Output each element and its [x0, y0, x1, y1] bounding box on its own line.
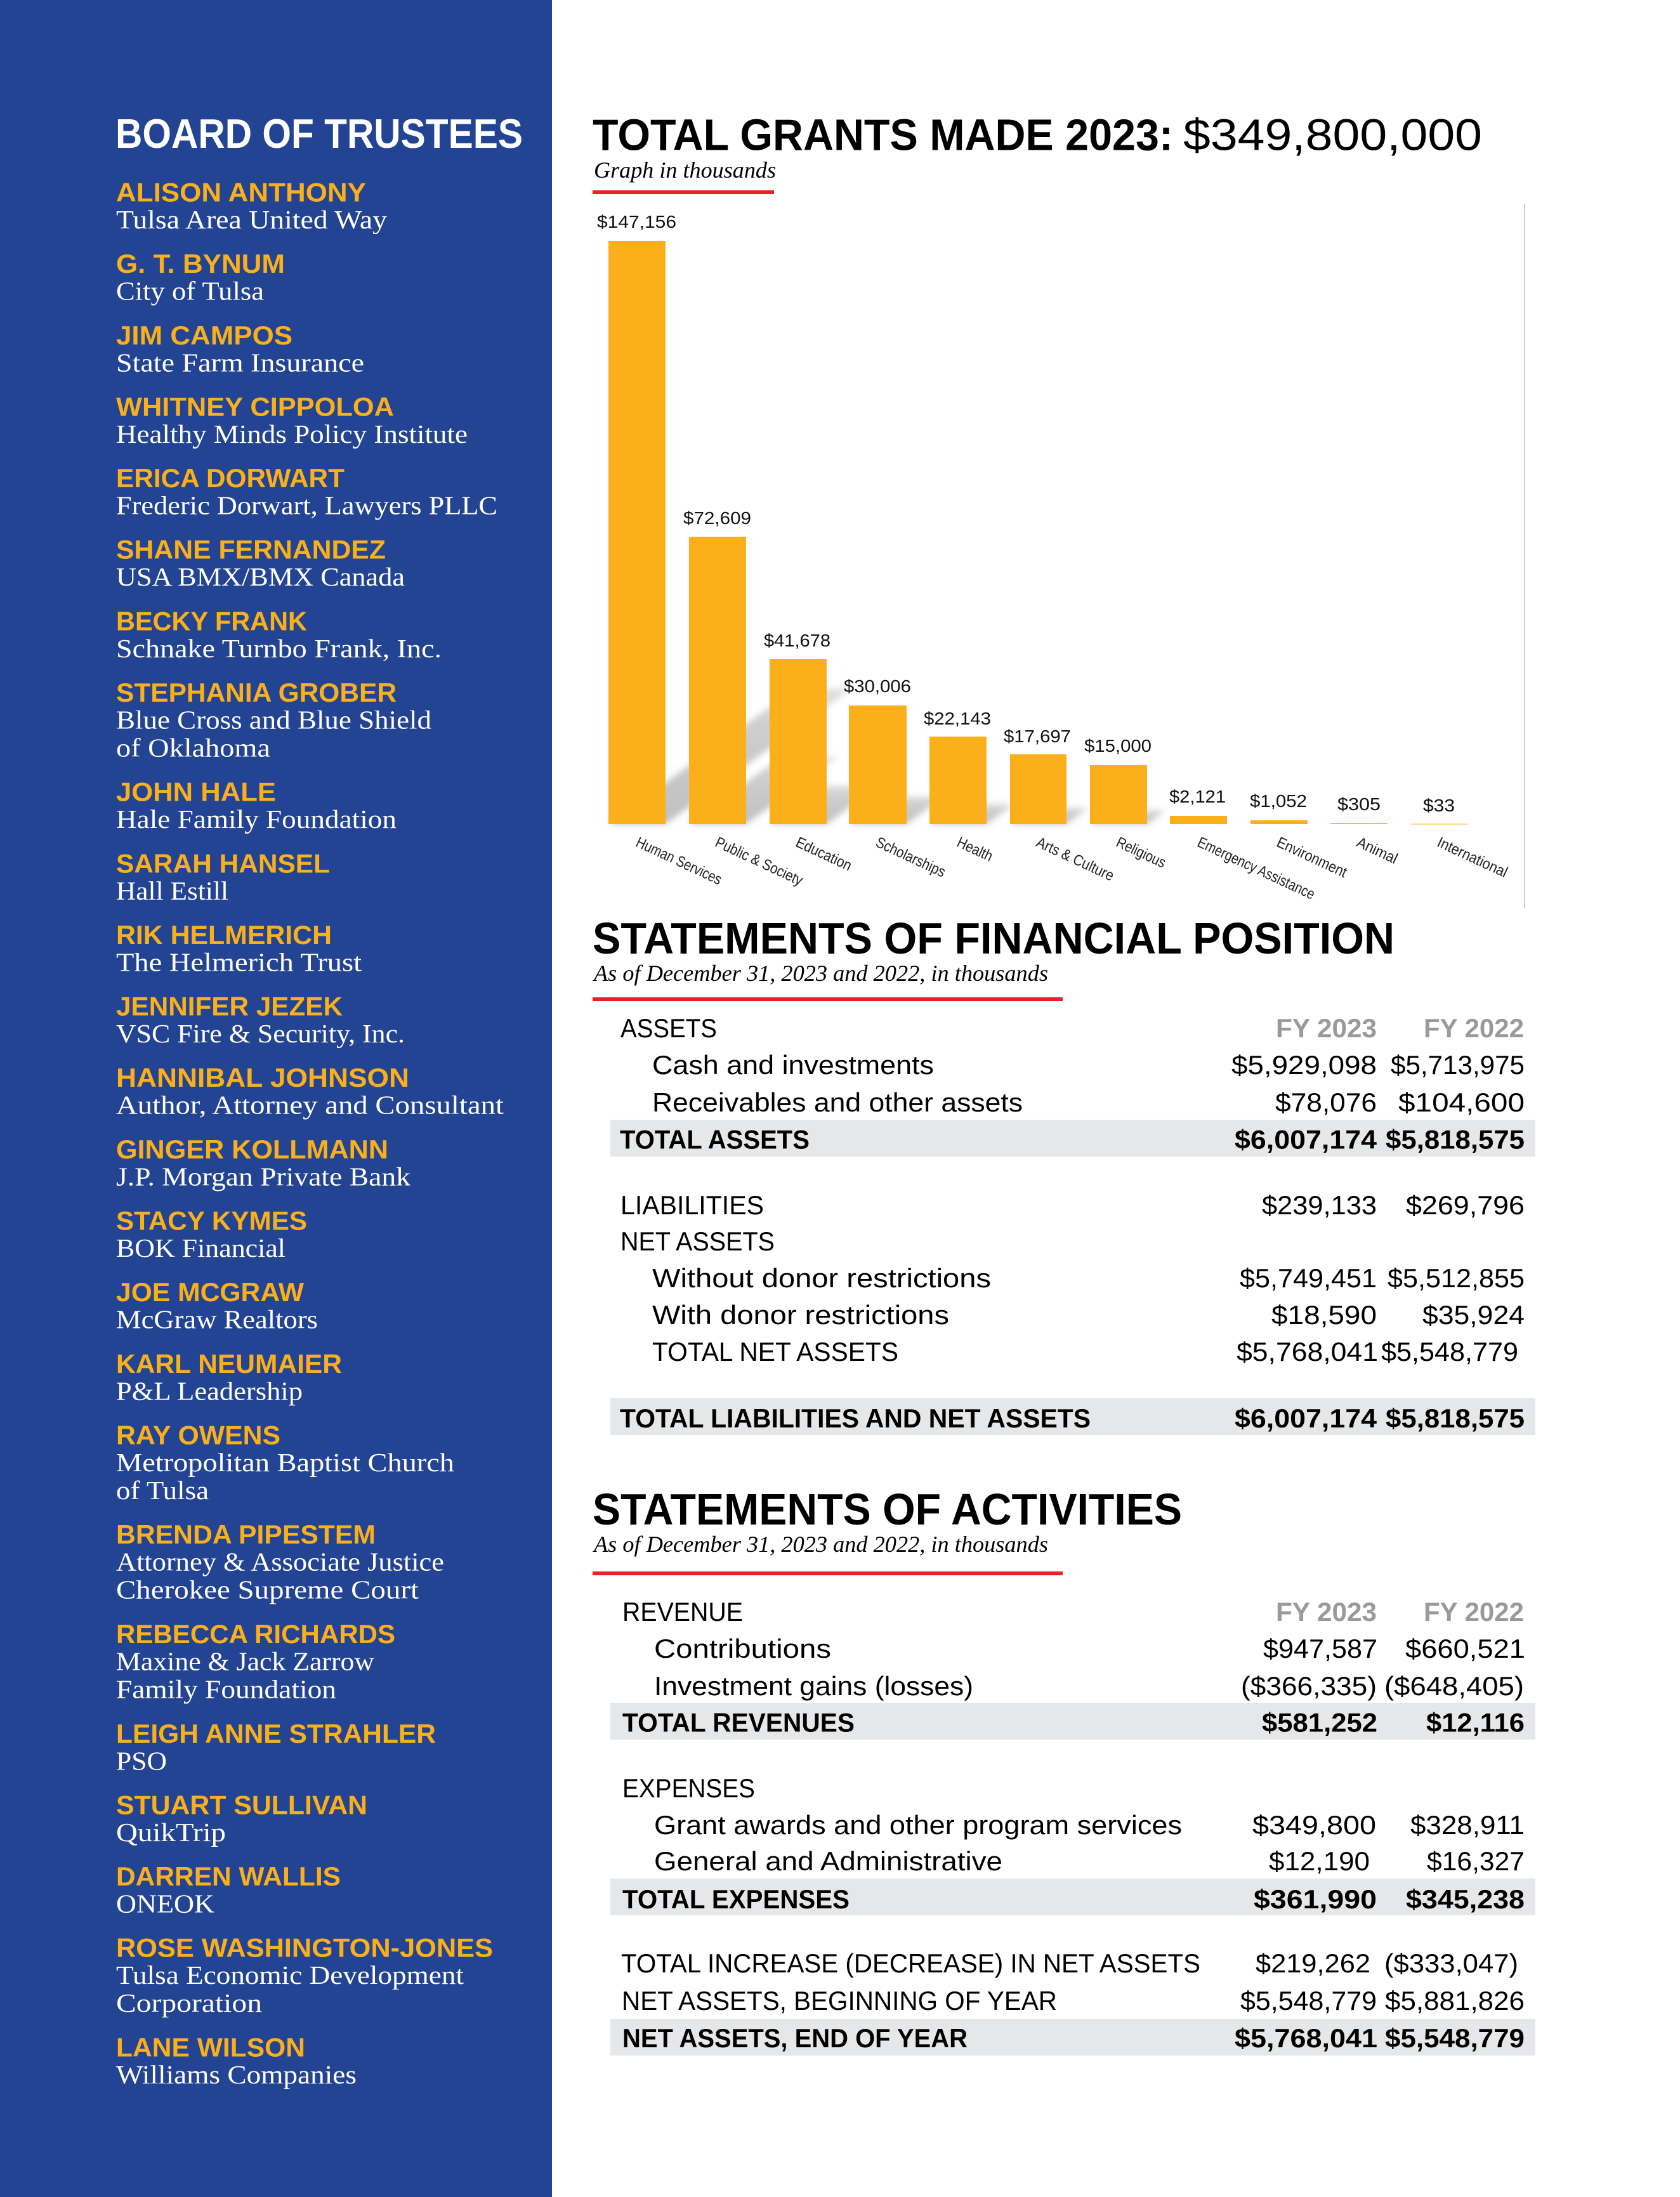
- trustee: Jennifer Jezek: VSC Fire & Security, Inc.: [116, 1019, 405, 1048]
- trustee: Ray Owens: [116, 1420, 454, 1505]
- row: contributions: [654, 1634, 1525, 1663]
- trustee: G. T. Bynum: [116, 249, 285, 306]
- bar: education: $41,678: [764, 631, 830, 650]
- trustee: Ray Owens: RAY OWENS: [116, 1420, 280, 1450]
- row: liabilities: $269,796: [1406, 1190, 1525, 1220]
- trustee: Lane Wilson: [116, 2033, 357, 2089]
- trustee: Sarah Hansel: SARAH HANSEL: [116, 848, 330, 878]
- trustee: Stacy Kymes: STACY KYMES: [116, 1205, 307, 1236]
- trustee: Shane Fernandez: SHANE FERNANDEZ: [116, 535, 386, 565]
- row: total revenues: [610, 1703, 1535, 1740]
- row: expenses header: EXPENSES: [622, 1773, 755, 1803]
- row: assets header: ASSETS: [620, 1013, 717, 1043]
- row: liabilities: $239,133: [1262, 1190, 1377, 1220]
- bar: education: Education: [793, 834, 855, 874]
- row: contributions: $947,587: [1263, 1634, 1377, 1663]
- row: general and administrative: General and Administrative: [654, 1846, 1002, 1876]
- trustee: Hannibal Johnson: [116, 1063, 504, 1120]
- bar: arts and culture: [1004, 726, 1117, 884]
- trustee: Rebecca Richards: REBECCA RICHARDS: [116, 1619, 395, 1649]
- trustee: Brenda Pipestem: Cherokee Supreme Court: [116, 1575, 419, 1604]
- row: net assets beginning of year: $5,881,826: [1385, 1986, 1525, 2016]
- bar: health: $22,143: [924, 709, 991, 728]
- row: without donor restrictions: [652, 1263, 1525, 1293]
- trustee: Sarah Hansel: [116, 848, 330, 905]
- trustee: Becky Frank: [116, 606, 442, 663]
- row: receivables: [652, 1087, 1525, 1117]
- trustee: Rik Helmerich: The Helmerich Trust: [116, 948, 362, 977]
- trustee: Rose Washington-Jones: ROSE WASHINGTON-JONES: [116, 1933, 493, 1963]
- trustee: Stuart Sullivan: STUART SULLIVAN: [116, 1790, 367, 1820]
- trustee: Hannibal Johnson: HANNIBAL JOHNSON: [116, 1063, 409, 1092]
- trustee: Stephania Grober: Blue Cross and Blue Shield: [116, 705, 431, 734]
- row: general and administrative: $16,327: [1427, 1846, 1525, 1876]
- trustee: Ray Owens: Metropolitan Baptist Church: [116, 1448, 454, 1477]
- bar: religious: $15,000: [1084, 736, 1152, 756]
- bar: scholarships: $30,006: [844, 676, 911, 696]
- bar: health: Health: [954, 834, 995, 865]
- row: grant awards: Grant awards and other program services: [654, 1810, 1182, 1840]
- row: grant awards: $349,800: [1252, 1810, 1376, 1840]
- trustee: Rose Washington-Jones: Corporation: [116, 1988, 262, 2017]
- row: net assets beginning of year: $5,548,779: [1240, 1986, 1377, 2016]
- bar: international: [1411, 796, 1510, 881]
- row: total assets: $5,818,575: [1386, 1124, 1525, 1155]
- bar: human services: $147,156: [597, 212, 676, 232]
- trustee: Erica Dorwart: Frederic Dorwart, Lawyers PLLC: [116, 491, 497, 520]
- subtitle: financial position date: As of December 31, 2023 and 2022, in thousands: [593, 961, 1048, 986]
- row: total net assets: $5,548,779: [1381, 1337, 1518, 1367]
- trustee: Stephania Grober: [116, 678, 431, 762]
- row: with donor restrictions: [652, 1300, 1525, 1330]
- trustee: John Hale: JOHN HALE: [116, 777, 276, 807]
- trustee: Sarah Hansel: Hall Estill: [116, 876, 228, 905]
- row: net assets end of year: $5,548,779: [1385, 2023, 1525, 2053]
- trustee: Rebecca Richards: Maxine & Jack Zarrow: [116, 1647, 374, 1676]
- trustee: Erica Dorwart: ERICA DORWART: [116, 463, 345, 493]
- row: without donor restrictions: $5,749,451: [1240, 1263, 1377, 1293]
- trustee: Stuart Sullivan: QuikTrip: [116, 1818, 226, 1847]
- trustee: Stuart Sullivan: [116, 1790, 367, 1847]
- row: receivables: $104,600: [1398, 1087, 1525, 1117]
- trustee: Jim Campos: [116, 320, 364, 377]
- trustee: Brenda Pipestem: BRENDA PIPESTEM: [116, 1519, 376, 1549]
- row: total revenues: $12,116: [1426, 1708, 1525, 1737]
- bar: scholarships: Scholarships: [873, 834, 948, 881]
- row: with donor restrictions: With donor restrictions: [652, 1300, 949, 1330]
- trustee: Karl Neumaier: [116, 1349, 342, 1405]
- row: contributions: $660,521: [1405, 1634, 1525, 1663]
- trustee: John Hale: Hale Family Foundation: [116, 804, 397, 834]
- bar: public and society: Public & Society: [712, 834, 806, 889]
- trustee: Lane Wilson: Williams Companies: [116, 2060, 357, 2089]
- trustee: G. T. Bynum: G. T. BYNUM: [116, 249, 285, 279]
- trustee: Alison Anthony: Tulsa Area United Way: [116, 205, 388, 234]
- trustee: Rebecca Richards: [116, 1619, 395, 1704]
- trustee: Whitney Cippoloa: WHITNEY CIPPOLOA: [116, 391, 394, 421]
- trustee: Jennifer Jezek: JENNIFER JEZEK: [116, 992, 343, 1021]
- row: total liabilities and net assets: TOTAL LIABILITIES AND NET ASSETS: [620, 1403, 1091, 1433]
- trustee: Stephania Grober: of Oklahoma: [116, 733, 270, 762]
- trustee: John Hale: [116, 777, 397, 834]
- row: total increase: [621, 1948, 1518, 1978]
- row: grant awards: $328,911: [1410, 1810, 1525, 1840]
- row: receivables: $78,076: [1275, 1087, 1377, 1117]
- bar: health: [924, 709, 995, 865]
- trustee: Darren Wallis: [116, 1861, 341, 1918]
- row: total expenses: [610, 1879, 1535, 1915]
- bar: scholarships: [844, 676, 948, 881]
- trustee: Darren Wallis: ONEOK: [116, 1889, 214, 1918]
- row: net assets header: NET ASSETS: [620, 1226, 775, 1256]
- row: total assets: $6,007,174: [1235, 1124, 1377, 1155]
- row: net assets end of year: $5,768,041: [1235, 2023, 1377, 2053]
- row: investment gains: ($648,405): [1384, 1671, 1524, 1701]
- title: total grants made 2023: TOTAL GRANTS MADE 2023:: [593, 110, 1173, 160]
- row: total revenues: $581,252: [1262, 1708, 1377, 1737]
- panel: statements of financial position: [593, 914, 1535, 1435]
- row: cash and investments: $5,929,098: [1231, 1050, 1377, 1080]
- row: investment gains: ($366,335): [1241, 1671, 1377, 1701]
- row: net assets end of year: [610, 2019, 1535, 2056]
- row: assets header: FY 2022: [1424, 1013, 1524, 1043]
- row: revenue header: REVENUE: [622, 1597, 743, 1627]
- trustee: Leigh Anne Strahler: PSO: [116, 1746, 167, 1775]
- bar: animal: $305: [1337, 794, 1381, 814]
- trustee: Rik Helmerich: [116, 920, 362, 977]
- trustee: Ginger Kollmann: [116, 1134, 411, 1191]
- heading: board of trustees: BOARD OF TRUSTEES: [115, 110, 523, 157]
- row: investment gains: [654, 1671, 1524, 1701]
- trustee: Becky Frank: Schnake Turnbo Frank, Inc.: [116, 634, 442, 663]
- bar: animal: [1330, 794, 1400, 867]
- trustee: Shane Fernandez: [116, 535, 405, 591]
- subtitle: activities date: As of December 31, 2023 and 2022, in thousands: [593, 1531, 1048, 1557]
- row: general and administrative: [654, 1846, 1525, 1876]
- row: net assets beginning of year: NET ASSETS, BEGINNING OF YEAR: [622, 1986, 1057, 2016]
- row: without donor restrictions: Without donor restrictions: [652, 1263, 991, 1293]
- bar: animal: Animal: [1354, 834, 1400, 867]
- trustee: Whitney Cippoloa: [116, 391, 468, 449]
- row: assets header: [620, 1013, 1524, 1043]
- row: total increase: ($333,047): [1384, 1948, 1518, 1978]
- trustee: Joe McGraw: McGraw Realtors: [116, 1305, 318, 1334]
- row: total expenses: TOTAL EXPENSES: [622, 1884, 850, 1914]
- title: total grants made 2023: $349,800,000: [1183, 110, 1482, 160]
- row: total assets: [610, 1120, 1535, 1157]
- row: revenue header: FY 2023: [1276, 1597, 1377, 1627]
- trustee: Whitney Cippoloa: Healthy Minds Policy Institute: [116, 419, 468, 449]
- bar: human services: Human Services: [633, 834, 725, 888]
- trustee: Alison Anthony: ALISON ANTHONY: [116, 178, 366, 207]
- row: cash and investments: Cash and investments: [652, 1050, 934, 1080]
- row: total increase: TOTAL INCREASE (DECREASE) IN NET ASSETS: [621, 1948, 1200, 1978]
- row: total liabilities and net assets: $6,007,174: [1235, 1403, 1377, 1433]
- bar: environment: [1250, 791, 1350, 881]
- row: cash and investments: [652, 1050, 1525, 1080]
- trustee: Brenda Pipestem: Attorney & Associate Justice: [116, 1547, 444, 1577]
- row: liabilities: LIABILITIES: [620, 1190, 764, 1220]
- trustee: Ginger Kollmann: GINGER KOLLMANN: [116, 1134, 388, 1164]
- trustee: Erica Dorwart: [116, 463, 497, 520]
- trustee: Darren Wallis: DARREN WALLIS: [116, 1861, 341, 1891]
- trustee: Jim Campos: State Farm Insurance: [116, 348, 364, 377]
- panel: statements of activities: [593, 1485, 1535, 2056]
- trustee: Alison Anthony: [116, 178, 388, 234]
- row: total net assets: TOTAL NET ASSETS: [652, 1337, 898, 1367]
- bar: emergency assistance: Emergency Assistance: [1195, 834, 1318, 903]
- trustee: G. T. Bynum: City of Tulsa: [116, 277, 264, 306]
- row: total net assets: $5,768,041: [1237, 1337, 1378, 1367]
- row: with donor restrictions: $35,924: [1422, 1300, 1525, 1330]
- row: total expenses: $345,238: [1406, 1884, 1525, 1914]
- row: assets header: FY 2023: [1276, 1013, 1377, 1043]
- trustee: Hannibal Johnson: Author, Attorney and Consultant: [116, 1091, 504, 1120]
- row: total liabilities and net assets: $5,818,575: [1386, 1403, 1525, 1433]
- trustee: Karl Neumaier: P&L Leadership: [116, 1376, 303, 1405]
- bar: public and society: $72,609: [683, 508, 751, 528]
- bar: arts and culture: Arts & Culture: [1034, 834, 1117, 884]
- trustee: Jim Campos: JIM CAMPOS: [116, 320, 292, 350]
- bar: human services: [597, 212, 725, 888]
- row: total increase: $219,262: [1256, 1948, 1370, 1978]
- trustee: Stephania Grober: STEPHANIA GROBER: [116, 678, 397, 707]
- bar: emergency assistance: $2,121: [1169, 787, 1226, 806]
- trustee: Leigh Anne Strahler: LEIGH ANNE STRAHLER: [116, 1719, 436, 1748]
- row: total expenses: $361,990: [1254, 1884, 1377, 1914]
- row: total revenues: TOTAL REVENUES: [622, 1708, 855, 1737]
- bar: religious: [1084, 736, 1169, 872]
- trustee: Stacy Kymes: [116, 1205, 307, 1262]
- trustee: Stacy Kymes: BOK Financial: [116, 1233, 285, 1262]
- row: total liabilities and net assets: [610, 1398, 1535, 1435]
- trustee: Leigh Anne Strahler: [116, 1719, 436, 1775]
- bar: international: International: [1434, 834, 1510, 881]
- bar chart: grants by category: [597, 204, 1525, 908]
- row: revenue header: FY 2022: [1424, 1597, 1524, 1627]
- heading: statements of activities: STATEMENTS OF ACTIVITIES: [593, 1485, 1182, 1534]
- subtitle: graph in thousands: Graph in thousands: [594, 157, 776, 183]
- title: total grants made 2023: [593, 110, 1482, 160]
- panel: board of trustees sidebar: [0, 0, 552, 2197]
- trustee: Joe McGraw: JOE MCGRAW: [116, 1277, 304, 1307]
- bar: education: [764, 631, 855, 874]
- trustee: Ginger Kollmann: J.P. Morgan Private Bank: [116, 1162, 411, 1191]
- trustee: Lane Wilson: LANE WILSON: [116, 2033, 305, 2062]
- row: receivables: Receivables and other assets: [652, 1087, 1023, 1117]
- bar: international: $33: [1423, 796, 1455, 815]
- row: net assets end of year: NET ASSETS, END OF YEAR: [622, 2023, 968, 2053]
- row: contributions: Contributions: [654, 1634, 831, 1663]
- trustee: Karl Neumaier: KARL NEUMAIER: [116, 1349, 342, 1379]
- bar: religious: Religious: [1113, 834, 1169, 872]
- row: cash and investments: $5,713,975: [1391, 1050, 1525, 1080]
- trustee: Rose Washington-Jones: [116, 1933, 493, 2017]
- trustee: Shane Fernandez: USA BMX/BMX Canada: [116, 562, 405, 591]
- row: net assets beginning of year: [622, 1986, 1525, 2016]
- trustee: Joe McGraw: [116, 1277, 318, 1334]
- row: without donor restrictions: $5,512,855: [1388, 1263, 1525, 1293]
- bar: arts and culture: $17,697: [1004, 726, 1071, 746]
- bar: public and society: [683, 508, 806, 889]
- bar: emergency assistance: [1169, 787, 1318, 903]
- row: general and administrative: $12,190: [1269, 1846, 1370, 1876]
- row: total assets: TOTAL ASSETS: [620, 1124, 810, 1155]
- trustee: Ray Owens: of Tulsa: [116, 1476, 209, 1505]
- bar: environment: $1,052: [1250, 791, 1307, 811]
- trustee: Rebecca Richards: Family Foundation: [116, 1675, 336, 1704]
- row: with donor restrictions: $18,590: [1271, 1300, 1377, 1330]
- trustee: Jennifer Jezek: [116, 992, 405, 1048]
- trustee: Rik Helmerich: RIK HELMERICH: [116, 920, 332, 950]
- heading: statements of financial position: STATEMENTS OF FINANCIAL POSITION: [593, 914, 1395, 963]
- row: grant awards: [654, 1810, 1525, 1840]
- trustee: Brenda Pipestem: [116, 1519, 444, 1604]
- row: liabilities: [620, 1190, 1525, 1220]
- trustee: Rose Washington-Jones: Tulsa Economic Development: [116, 1960, 464, 1990]
- row: revenue header: [622, 1597, 1524, 1627]
- panel: total grants heading: [593, 110, 1482, 194]
- trustee: Becky Frank: BECKY FRANK: [116, 606, 307, 636]
- row: investment gains: Investment gains (losses): [654, 1671, 973, 1701]
- row: total net assets: [652, 1337, 1518, 1367]
- bar: environment: Environment: [1274, 834, 1350, 881]
